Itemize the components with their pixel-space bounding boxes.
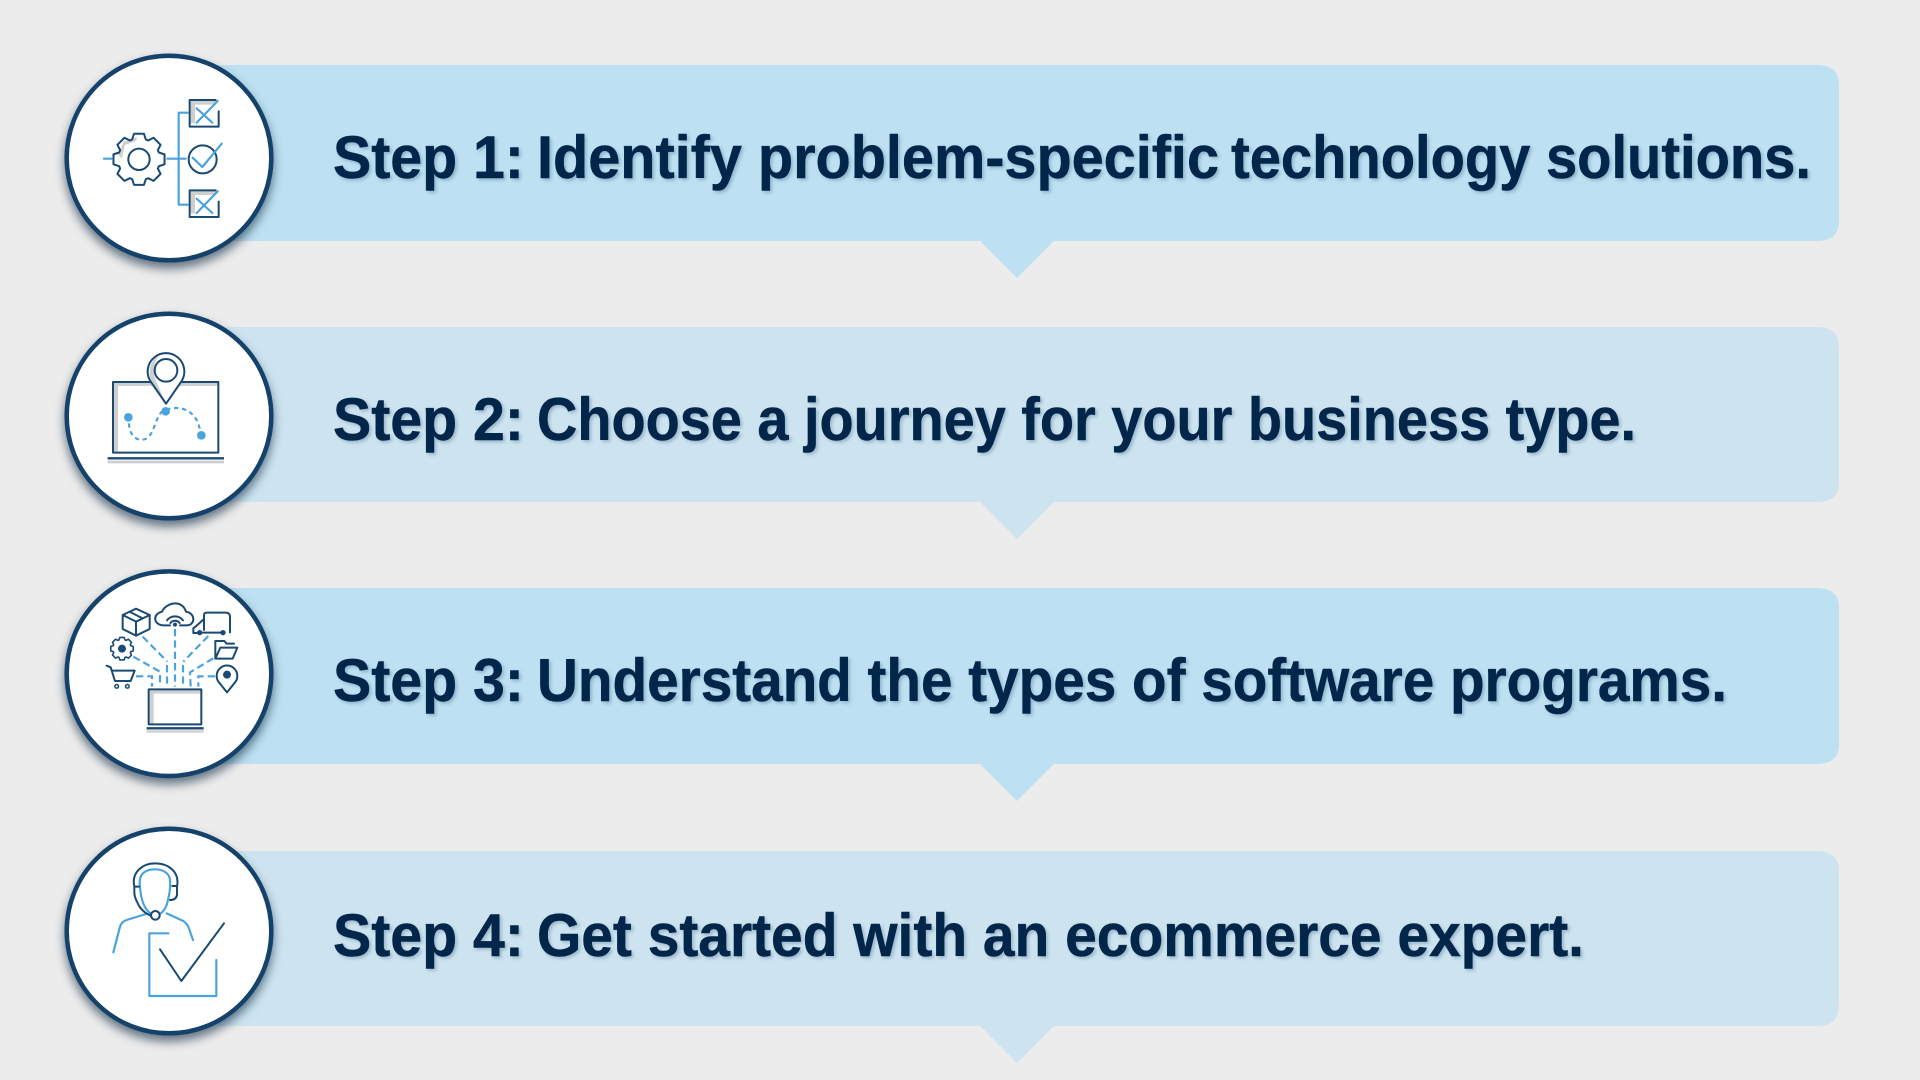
- step 4 badge circle: [67, 829, 271, 1033]
- step 1 text: technology solutions.: [1231, 124, 1811, 191]
- step 1 speech banner: [200, 65, 1839, 278]
- panel: step 3: [67, 571, 1839, 801]
- step 4 speech banner: [200, 851, 1839, 1063]
- step 1 text: Step 1:: [333, 124, 524, 191]
- icon: software network around laptop: [107, 603, 237, 733]
- panel: step 1: [67, 56, 1839, 278]
- step 4 text: Step 4:: [333, 902, 524, 969]
- panel: step 2: [67, 314, 1839, 539]
- icon: support agent with checkmark: [113, 863, 224, 996]
- step 1 text: [333, 124, 1811, 191]
- step 2 text: Step 2:: [333, 386, 524, 453]
- step 3 speech banner: [200, 588, 1839, 801]
- icon: map route with pin on laptop: [108, 353, 224, 463]
- icon: gear and checklist: [104, 100, 222, 217]
- step 2 badge circle: [67, 314, 271, 518]
- step 1 badge circle: [67, 56, 271, 260]
- step 1 text: Identify problem-specific: [537, 124, 1219, 191]
- step 3 text: Understand the types of software programs.: [537, 647, 1727, 714]
- step 2 speech banner: [200, 327, 1839, 539]
- panel: step 4: [67, 829, 1839, 1063]
- step 2 text: Choose a journey for your business type.: [537, 386, 1636, 453]
- step 3 badge circle: [67, 571, 271, 776]
- step 3 text: Step 3:: [333, 647, 524, 714]
- step 4 text: Get started with an ecommerce expert.: [537, 902, 1584, 969]
